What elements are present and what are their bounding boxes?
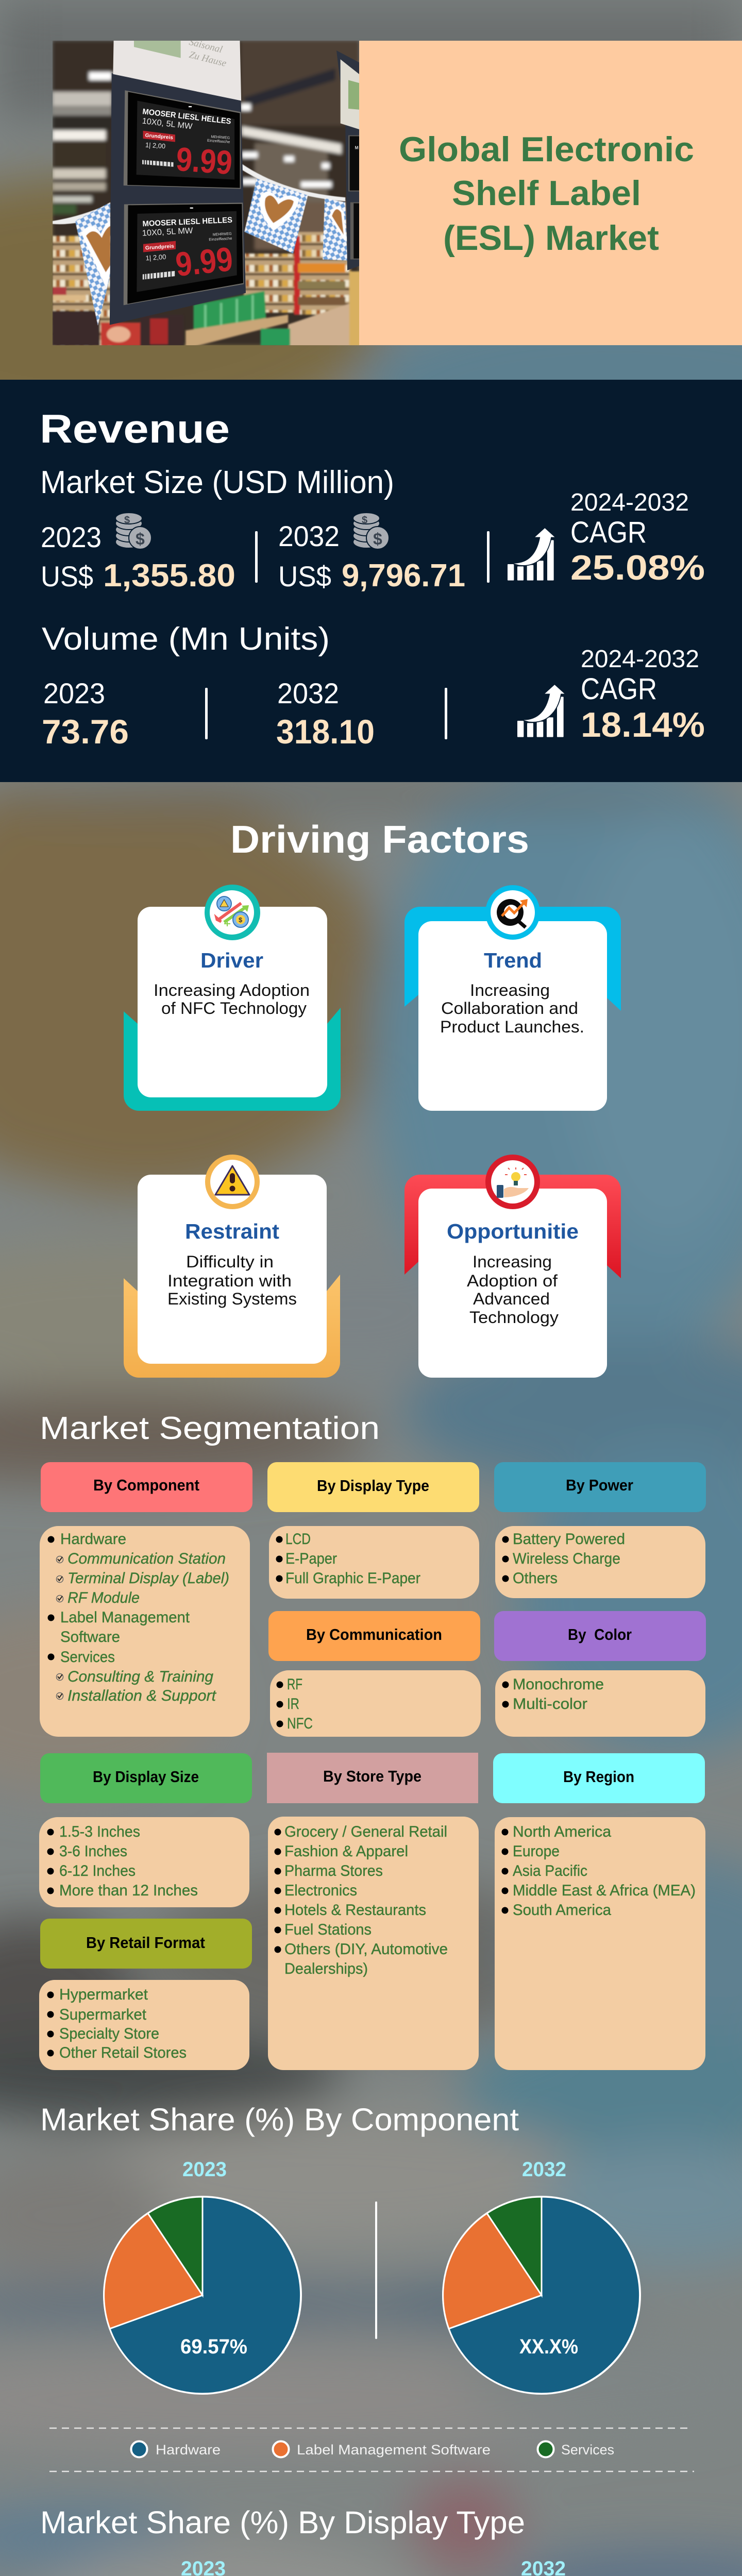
heading: share by component: Market Share (%) By Component [40,2102,519,2137]
CAGR revenue [570,489,705,587]
segment: by region: South America [513,1902,611,1919]
label: driver: Driver [200,948,263,972]
pie chart: component 2023: 2023 [182,2158,227,2181]
upper shelf label: MOOSER LIESL HELLES [142,107,231,126]
text: opportunity: Adoption of [467,1272,558,1290]
market size 2023: 2023 [41,521,102,553]
text: trend: Increasing [470,981,550,999]
divider [205,688,208,739]
text: opportunity: Advanced [473,1290,550,1308]
segment: by display size: 3-6 Inches [59,1843,127,1860]
icon: coins 2023: $ [124,515,130,526]
segment: by display size: By Display Size [93,1768,199,1786]
segment: by store type: Others (DIY, Automotive [284,1941,448,1958]
segment: by component [40,1462,252,1737]
segment: by component: Consulting & Training [68,1668,213,1685]
icon: coins 2032 [353,513,389,549]
heading: driving factors: Driving Factors [230,818,529,861]
upper shelf label: 1| 2,00 [145,141,166,150]
icon: driver: $ [239,916,243,924]
right edge: second shelf label panel [336,50,361,270]
segment: by retail format: Specialty Store [59,2025,159,2042]
market size 2032 [278,520,465,594]
upper shelf label: MEHRWEG [211,134,230,140]
text: trend [440,981,584,1036]
segment: by display type: E-Paper [285,1550,337,1567]
segment: by power: Battery Powered [513,1531,625,1548]
hanging panel [110,73,246,325]
CAGR volume: CAGR [581,672,657,706]
heading: volume: Volume (Mn Units) [42,621,330,657]
text: restraint [167,1252,297,1308]
segment: by display size: More than 12 Inches [59,1882,198,1899]
title: (ESL) Market [443,218,659,258]
legend: component: Hardware [156,2442,221,2458]
market size 2032: 9,796.71 [342,558,465,594]
segment: by display size [39,1753,252,1907]
segment: by display size: 1.5-3 Inches [59,1823,140,1840]
market size 2023: US$ [41,560,93,592]
segment: by store type: By Store Type [323,1767,421,1785]
segment: by region [493,1753,705,2070]
text: restraint: Existing Systems [167,1290,297,1308]
top sign: Zu Hause [188,49,228,69]
CAGR revenue: 2024-2032 [570,489,689,516]
CAGR volume: 18.14% [581,705,705,744]
volume 2023: 73.76 [42,713,129,751]
segment: by region: Europe [513,1843,560,1860]
segment: by color [494,1611,706,1737]
segment: by component: Software [60,1629,120,1646]
icon: coins 2023: $ [136,530,145,548]
market size 2032: US$ [278,560,331,592]
pie chart: component 2032 [442,2158,641,2395]
text: opportunity: Technology [469,1308,559,1327]
segment: by component: Label Management [60,1609,190,1626]
segment: by communication: NFC [287,1715,313,1732]
market size 2032: 2032 [278,520,340,552]
segment: by store type: Pharma Stores [284,1862,383,1879]
lower shelf label: MOOSER LIESL HELLES [142,216,232,228]
heading: revenue: Revenue [40,406,230,451]
segment: by display type: By Display Type [317,1477,429,1495]
upper shelf label: 9.99 [175,140,233,181]
segment: by communication: IR [287,1696,299,1713]
segment: by display type: LCD [285,1531,311,1548]
volume 2032 [276,677,375,751]
icon: growth arrow [508,528,556,581]
icon: warning [215,1166,249,1195]
lower shelf label [124,202,244,305]
legend: component [49,2428,694,2471]
segment: by communication: By Communication [306,1625,442,1643]
top sign: Saisonal [188,37,224,55]
icon: opportunity [497,1167,529,1198]
segment: by display type: Full Graphic E-Paper [285,1570,420,1587]
legend: component: Services [561,2442,614,2458]
segment: by component: Terminal Display (Label) [68,1570,229,1587]
segment: by store type: Grocery / General Retail [284,1823,447,1840]
segment: by retail format [39,1919,252,2070]
revenue panel [0,380,742,782]
card: trend [404,885,621,1111]
segment: by store type: Fuel Stations [284,1921,372,1938]
title: Global Electronic [399,130,694,169]
CAGR volume: 2024-2032 [581,646,699,673]
segment: by display type [267,1462,479,1599]
segment: by retail format: By Retail Format [86,1934,205,1952]
segment: by component: Hardware [60,1531,126,1548]
label: trend: Trend [484,948,542,972]
market size 2023: 1,355.80 [103,558,235,594]
segment: by retail format: Other Retail Stores [59,2044,187,2061]
pie chart: component 2032: XX.X% [519,2335,578,2358]
segment: by display size: 6-12 Inches [59,1862,136,1879]
divider [445,688,447,739]
card: driver [124,885,341,1111]
lower shelf label: MEHRWEG [213,231,232,237]
segment: by retail format: Hypermarket [59,1986,148,2003]
text: opportunity [467,1252,559,1327]
CAGR revenue: 25.08% [570,548,705,587]
upper shelf label: Grundpreis [145,133,174,141]
text: trend: Product Launches. [440,1018,584,1036]
segment: by component: Installation & Support [68,1687,217,1704]
segment: by communication: RF [287,1676,302,1693]
lower shelf label: 10X0, 5L MW [142,226,194,238]
segment: by store type [267,1753,479,2070]
segment: by component: Services [60,1649,115,1666]
segment: by color: By Color [568,1625,632,1643]
title panel [359,41,742,345]
upper shelf label [124,90,241,189]
icon: growth arrow [517,684,566,737]
label: opportunity: Opportunitie [447,1219,579,1243]
segment: by component: By Component [93,1476,199,1494]
right edge: second shelf label panel: M [355,145,359,150]
card: opportunity [404,1155,621,1378]
text: driver: Increasing Adoption [154,981,310,999]
text: driver: of NFC Technology [161,999,307,1018]
lower shelf label: Einzelflasche [209,236,232,242]
segment: by power: Wireless Charge [513,1550,620,1567]
upper shelf label: 10X0, 5L MW [142,116,193,131]
segment: by color: Monochrome [513,1676,604,1693]
text: opportunity: Increasing [473,1252,552,1271]
icon: coins 2023 [115,513,151,549]
pie chart: component 2032: 2032 [522,2158,566,2181]
segment: by component: RF Module [68,1589,140,1606]
lower shelf label: 1| 2,00 [145,253,166,262]
market size 2023 [41,521,235,594]
volume 2032: 2032 [277,677,339,709]
text: trend: Collaboration and [441,999,578,1018]
pie chart: component 2023 [103,2158,302,2395]
heading: share by display type: Market Share (%) By Display Type [40,2505,525,2540]
icon: coins 2032: $ [362,515,367,526]
segment: by retail format: Supermarket [59,2006,147,2023]
segment: by store type: Hotels & Restaurants [284,1902,426,1919]
pie chart: component 2023: 69.57% [180,2335,247,2358]
CAGR volume [581,646,705,744]
divider [255,531,258,583]
segment: by power [494,1462,706,1598]
label: restraint: Restraint [185,1219,279,1243]
icon: coins 2032: $ [373,530,382,548]
upper shelf label: Einzelflasche [207,138,230,144]
divider [487,531,490,583]
lower shelf label: Grundpreis [145,244,175,251]
heading: market segmentation: Market Segmentation [40,1411,380,1446]
title [399,130,694,258]
card: restraint [124,1155,340,1378]
volume 2023 [42,677,129,751]
top sign [113,37,241,101]
segment: by region: By Region [563,1768,634,1786]
heading: market size: Market Size (USD Million) [40,465,394,500]
CAGR revenue: CAGR [570,516,647,549]
segment: by color: Multi-color [513,1696,587,1713]
segment: by component: Communication Station [68,1550,226,1567]
volume 2023: 2023 [43,677,105,709]
segment: by region: North America [513,1823,611,1840]
segment: by communication [268,1611,481,1737]
icon: driver [216,896,249,927]
segment: by store type: Electronics [284,1882,357,1899]
segment: by power: By Power [566,1476,633,1494]
icon: trend [497,899,528,927]
text: restraint: Integration with [167,1272,292,1290]
text: driver [154,981,310,1018]
segment: by region: Asia Pacific [513,1862,587,1879]
title: Shelf Label [452,174,641,213]
store shelves [53,232,361,348]
lower shelf label: 9.99 [174,240,234,283]
text: restraint: Difficulty in [186,1252,274,1271]
legend: component: Label Management Software [297,2442,491,2458]
volume 2032: 318.10 [276,713,375,751]
segment: by store type: Fashion & Apparel [284,1843,408,1860]
segment: by store type: Dealerships) [284,1960,368,1977]
divider [375,2201,377,2339]
header photo: electronic shelf labels in a store [53,37,361,348]
segment: by region: Middle East & Africa (MEA) [513,1882,696,1899]
segment: by power: Others [513,1570,558,1587]
